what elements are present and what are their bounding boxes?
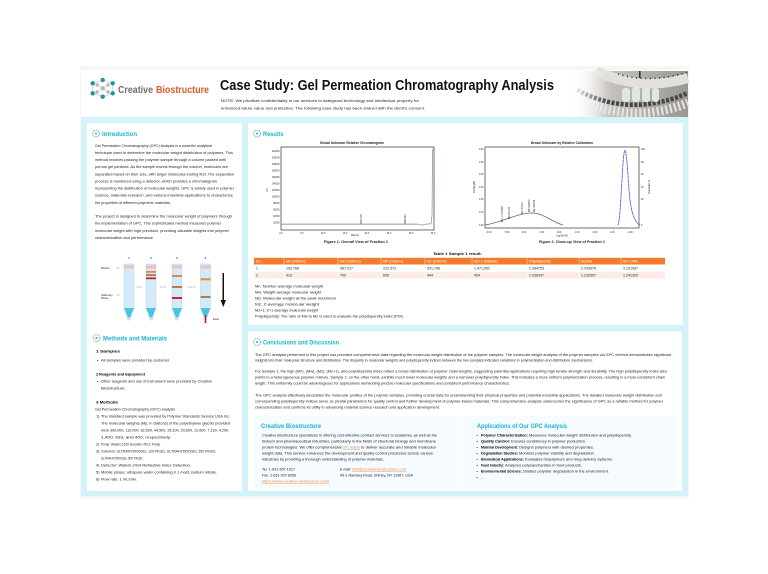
column labels (101, 266, 219, 321)
heading: Conclusions and Discussion: Conclusions and Discussion (263, 339, 339, 346)
text: introduction: characterization and performance. (95, 235, 154, 240)
table: sample 1 result: 2.344753 (529, 266, 544, 270)
poster shadow (80, 66, 689, 498)
chart: figure 1 chromatogram: 100000 (272, 196, 280, 198)
text: introduction (95, 143, 235, 240)
text: methods: Gel Permeation Chromatography (GPC) analysis (95, 406, 175, 412)
icon: molecule (90, 78, 115, 99)
chart: figure 2 relative calibration: 0.00 (479, 225, 484, 227)
table: sample 1 result: 1 (256, 266, 258, 270)
table: sample 1 result: 413 (286, 274, 292, 278)
chart: figure 2 relative calibration: Mw=367017 (522, 201, 524, 214)
text: table notes (255, 284, 404, 318)
text: methods: 1) (96, 414, 100, 418)
chart: figure 1 chromatogram: 26.641 (404, 214, 407, 222)
heading: Methods and Materials: Methods and Materials (103, 335, 167, 342)
logo wordmark: Creative (118, 85, 153, 96)
chart: figure 1 chromatogram: 60000 (273, 210, 280, 212)
chart: figure 2 relative calibration: Mz=931796 (509, 206, 511, 219)
column labels: Elute (213, 317, 219, 321)
column labels: Stationary (101, 293, 113, 297)
text: introduction: The project is designed to determine the molecular weight of polymers through (95, 214, 232, 218)
callout: Creative Biostructure: Fax: 1-631-207-8356 (262, 472, 296, 478)
text: conclusions: characterization and confirms its utility in advancing material science research and application development. (255, 404, 440, 410)
text: conclusions: points to a heterogeneous polymer mixture. Sample 2, on the other hand, exhibits much lower molecular weights and a narrower polydispersity index. This indicates a more uniform polymerization process, resulting in a more consistent chain (255, 374, 665, 379)
chart: figure 2 relative calibration: 0 (641, 225, 643, 227)
callout: Applications of Our GPC Analysis: Studies polymer degradation in the environment. (523, 468, 609, 474)
chart: figure 2 relative calibration: 0.10 (479, 212, 484, 214)
callout: Creative Biostructure: protein technologies. We offer comprehensive (262, 444, 342, 450)
callout: Applications of Our GPC Analysis: • (476, 468, 478, 474)
logo wordmark: Biostructure (156, 85, 209, 96)
text: methods: 5) (96, 470, 100, 474)
text: methods: 1,400, 633, and 400, respectively. (101, 434, 171, 440)
text: introduction: science, materials research, and various industrial applications to characterize (95, 193, 233, 198)
text: introduction: representing the distribution of molecular weights. GPC is widely used in polymer (95, 186, 235, 190)
chart: figure 2 relative calibration: 1.00 (575, 232, 580, 234)
callout: Applications of Our GPC Analysis: Biomedical Applications: (481, 456, 524, 462)
text: methods: • (97, 378, 99, 384)
callout: Applications of Our GPC Analysis: ... (481, 474, 484, 480)
chart: figure 2 relative calibration: Broad Unknown by Relative Calibration (531, 141, 593, 145)
table: sample 1 result: 931,796 (427, 266, 440, 270)
chart: figure 1 chromatogram: mV (267, 188, 269, 192)
chart: figure 1 chromatogram: 80000 (273, 203, 280, 205)
text: table notes: Polydispersity: The ratio of Mw to Mn is used to evaluate the polydispersity index (PDI). (255, 314, 404, 318)
text: table notes: Mn: Number average molecular weight (255, 284, 324, 288)
text: methods: Other reagents and use of instrument were provided by Creative (101, 378, 212, 384)
chart: figure 1 chromatogram: 35.0 (431, 233, 436, 235)
table: sample 1 result: 1,471,652 (474, 266, 490, 270)
callout: Applications of Our GPC Analysis: Evaluates biopolymers and drug delivery systems. (525, 456, 613, 462)
chart: figure 2 relative calibration (473, 141, 651, 244)
text: introduction: porous gel particles. As the sample travels through the column, molecules are (95, 164, 228, 169)
table: sample 1 result: Mz+1 (Daltons) (474, 260, 498, 264)
table: sample 1 result: No. (256, 260, 261, 264)
callout: Creative Biostructure: Creative Biostructure specializes in offering cost-effective contract services to academia, as well as the (262, 432, 437, 438)
text: methods: 3) (96, 448, 100, 454)
chart: figure 2 relative calibration: Figure 2. Close-up View of Fraction 1 (539, 239, 606, 244)
text: table notes: Mw: Weight average molecular weight (255, 290, 322, 294)
chart: figure 1 chromatogram: 5.0 (300, 233, 304, 235)
callout: Applications of Our GPC Analysis: Environmental Science: (481, 468, 522, 474)
callout: Applications of Our GPC Analysis: Material Development: (481, 444, 518, 450)
callout: Creative Biostructure: weight data. This service enhances the development and quality control processes across various (262, 450, 433, 456)
text: methods: All samples were provided by customer. (101, 358, 170, 362)
header background (81, 70, 688, 117)
heading: Results: Results (263, 131, 284, 138)
chart: figure 2 relative calibration: MP=222573 (529, 199, 531, 212)
text: methods: 6) (96, 476, 100, 482)
panel: results (248, 123, 683, 325)
chart: figure 2 relative calibration: 0.30 (479, 187, 484, 189)
callout: Creative Biostructure: Creative Biostructure (261, 424, 322, 430)
text: table notes: Mp: Molecular weight at the peak maximum (255, 296, 336, 300)
logo (90, 78, 209, 99)
callout: Creative Biostructure (254, 416, 457, 488)
callout: Applications of Our GPC Analysis: • (476, 474, 478, 480)
table: sample 1 result: MP (Daltons) (383, 260, 403, 264)
chart: figure 2 relative calibration: Log Mol Wt (556, 234, 568, 238)
table: sample 1 result: Mz+1/Mw (623, 260, 639, 264)
header photo: autosampler (572, 71, 688, 117)
chart: figure 1 chromatogram: 30.0 (409, 233, 414, 235)
text: conclusions: length. This uniformity could be advantageous for applications demanding precise molecular specifications and consistent performance characteristics. (255, 380, 510, 386)
column 2: 2 (150, 256, 152, 260)
column labels: Mixture (101, 266, 110, 270)
chart: figure 2 relative calibration: 6.00 (487, 232, 492, 234)
text: introduction: the properties of different polymeric materials. (95, 200, 171, 205)
table: sample 1 result: 444 (427, 274, 433, 278)
callout: Applications of Our GPC Analysis: Designs polymers with desired properties. (519, 444, 594, 450)
text: conclusions: For Sample 1, the high (Mn), (Mw), (Mz), (Mz+1), and polydispersity index reflect a broad distribution of polymer chain lengths, suggesting potential applications requiring high tensile strength and durability. The high polydispersity index also (255, 368, 667, 374)
text: methods (95, 348, 230, 482)
callout: Applications of Our GPC Analysis: Polymer Characterization: (481, 432, 528, 438)
callout: Creative Biostructure: https://www.creative-biostructure.com/ (262, 478, 330, 484)
table: sample 1 result: Mz/Mw (581, 260, 593, 264)
callout: Applications of Our GPC Analysis: Applications of Our GPC Analysis (477, 424, 568, 430)
chart: figure 1 chromatogram: 160000 (272, 177, 280, 179)
column 4: 4 (205, 256, 207, 260)
chart: figure 2 relative calibration: 0.50 (479, 162, 484, 164)
chart: figure 1 chromatogram (267, 141, 436, 244)
chart: figure 2 relative calibration: dwt/d(logM) (473, 181, 476, 193)
chart: figure 2 relative calibration: -2.00 (627, 232, 633, 234)
table: sample 1 result: 1.241309 (623, 274, 638, 278)
chart: figure 1 chromatogram: 240000 (272, 151, 280, 153)
column 3: 3 (176, 256, 178, 260)
chart: figure 2 relative calibration: 0.00 (593, 232, 598, 234)
text: introduction: molecular weight with high precision, providing valuable insights into polymer (95, 228, 230, 233)
logo wordmark (118, 85, 209, 96)
chart: figure 1 chromatogram: 20.079 (360, 214, 363, 222)
callout: Applications of Our GPC Analysis: • (476, 456, 478, 462)
panel: introduction, column diagram, methods (87, 123, 242, 491)
callout: Creative Biostructure: to deliver accurate and reliable molecular (361, 444, 437, 450)
table: sample 1 result: 222,573 (383, 266, 396, 270)
text: conclusions: insights into their molecular structure and distribution. The disparity in molecular weights and polydispersity indices between the two samples indicates variations in polymerization and distribution mechanisms. (255, 358, 593, 362)
text: introduction: Gel Permeation Chromatography (GPC) Analysis is a powerful analytical (95, 143, 212, 148)
chart: figure 2 relative calibration: 0.60 (479, 149, 484, 151)
chart: figure 1 chromatogram: 220000 (272, 158, 280, 160)
table: sample 1 result: 2.243676 (581, 266, 596, 270)
callout: Creative Biostructure: biotech and pharmaceutical industries, particularly in the fields of structural biology and membrane (262, 438, 436, 444)
text: methods: • (97, 358, 99, 362)
text: methods: The standard sample was provided by Polymer Standards Service USA Inc. (101, 414, 230, 418)
text: methods: ULTRAHYDROGEL 500 PKGD. (101, 456, 143, 460)
callout: Applications of Our GPC Analysis: • (476, 450, 478, 456)
table: sample 1 result: 700 (340, 274, 346, 278)
heading: Introduction: Introduction (102, 131, 137, 138)
table: sample 1 result: 1.036437 (529, 274, 544, 278)
text: methods: Flow rate: 1 mL/min. (101, 476, 137, 482)
table: sample 1 result: 2 (256, 274, 258, 278)
background band (81, 117, 688, 496)
text: conclusions: corresponding polydispersity indices serve as pivotal parameters for quality control and further development of polymer-based materials. This comprehensive analysis underscores the significance of GPC as a reliable method for polymer (255, 398, 664, 404)
chart: figure 1 chromatogram: 0.0 (279, 233, 283, 235)
table: sample 1 result: Mn (Daltons) (286, 260, 306, 264)
table: sample 1 result: Table 1 Sample 1 result: (433, 251, 482, 256)
table: sample 1 result: 650 (383, 274, 389, 278)
chart: figure 2 relative calibration: 100 (641, 149, 646, 151)
chart: figure 2 relative calibration: -1.00 (609, 232, 615, 234)
table: sample 1 result: Polydispersity (529, 260, 551, 264)
chart: figure 2 relative calibration: 60 (641, 174, 644, 176)
table: sample 1 result: 153,766 (286, 266, 299, 270)
callout: Applications of Our GPC Analysis (458, 416, 677, 488)
callout: Applications of Our GPC Analysis: Analyzes polysaccharides in food products. (505, 462, 582, 468)
chart: figure 1 chromatogram: Broad Unknown Relative Chromatogram (320, 141, 384, 145)
chart: figure 2 relative calibration: 2.00 (557, 232, 562, 234)
callout: Applications of Our GPC Analysis: • (476, 444, 478, 450)
chart: figure 2 relative calibration: Cumulative % (648, 180, 651, 194)
text: methods: were 300,000, 110,000, 82,500, 44,500, 26,100, 20,600, 12,600, 7,130, 4,290, (101, 428, 229, 432)
note text (221, 98, 425, 110)
chart: figure 2 relative calibration: Mz+1=1471652 (502, 205, 504, 222)
chart: figure 1 chromatogram: Figure 1. Overall View of Fraction 1 (324, 239, 389, 244)
diagram: GPC column separation (101, 256, 226, 323)
note text: NOTE: We prioritize confidentiality in our services to safeguard technology and intellectual property for (221, 98, 420, 103)
text: introduction: the implementation of GPC. This sophisticated method measures polymer (95, 221, 222, 226)
chart: figure 1 chromatogram: 25.0 (387, 233, 392, 235)
table: sample 1 result: 367,017 (340, 266, 353, 270)
chart: figure 1 chromatogram: Minutes (351, 234, 360, 237)
text: conclusions: The GPC analysis performed in this project has provided comprehensive data regarding the molecular weight distribution of the polymer samples. The molecular weight analysis of the polymer samples via GPC method demonstrates significant (255, 352, 672, 357)
text: methods: The molecular weights (Mp, in Daltons) of the polyethylene glycols provided (101, 420, 230, 426)
note text: enhanced future value and protection. The following case study has been shared with the client's consent. (221, 106, 425, 110)
chart: figure 1 chromatogram: 140000 (272, 184, 280, 186)
text: table notes: Mz+1: Z+1 average molecular weight (255, 308, 319, 312)
heading: Results (254, 130, 284, 138)
chart: figure 1 chromatogram: 10.0 (321, 233, 326, 235)
arrow: downward flow (220, 273, 226, 307)
title: Case Study: Gel Permeation Chromatography Analysis (220, 78, 554, 94)
chart: figure 2 relative calibration: 20 (641, 199, 644, 201)
chart: figure 2 relative calibration: 0.40 (479, 174, 484, 176)
chart: figure 2 relative calibration: 40 (641, 187, 644, 189)
column 1: 1 (128, 256, 130, 260)
callout: Creative Biostructure: 45-1 Ramsey Road, Shirley, NY 11967, USA (340, 472, 413, 478)
callout: Applications of Our GPC Analysis: • (476, 462, 478, 468)
text: methods: Biostructure. (101, 386, 126, 390)
chart: figure 1 chromatogram: 200000 (272, 164, 280, 166)
text: introduction: separated based on their size, with larger molecules eluting first. The separation (95, 171, 234, 176)
table: sample 1 result (254, 251, 665, 278)
text: introduction: method involves passing the polymer sample through a column packed with (95, 157, 226, 162)
table: sample 1 result: 3.101087 (623, 266, 638, 270)
callout: Creative Biostructure: info@creative-biostructure.com (352, 466, 406, 472)
text: methods: 1 Samples (96, 348, 120, 354)
callout: Creative Biostructure: GPC analysis (343, 444, 360, 450)
chart: figure 2 relative calibration: 5.00 (505, 232, 510, 234)
chart: figure 1 chromatogram: 20000 (273, 222, 280, 224)
callout: Applications of Our GPC Analysis: Measures molecular weight distribution and polydispersity. (529, 432, 632, 438)
callout: Creative Biostructure: Tel: 1-631-357-1017 (262, 466, 295, 472)
callout: Applications of Our GPC Analysis: Monitors polymer stability and degradation. (519, 450, 595, 456)
panel: conclusions and discussion (248, 332, 682, 491)
callout: Applications of Our GPC Analysis: • (476, 432, 478, 438)
chart: figure 1 chromatogram: 20.0 (365, 233, 370, 235)
text: table notes: Mz: Z-average molecular weight (255, 302, 320, 306)
heading: Introduction (93, 130, 137, 138)
chart: figure 1 chromatogram: 180000 (272, 170, 280, 172)
callout: Applications of Our GPC Analysis: Degradation Studies: (481, 450, 518, 456)
callout: Applications of Our GPC Analysis: Food Industry: (481, 462, 504, 468)
text: introduction: technique used to determine the molecular weight distribution of polymers. This (95, 150, 233, 155)
text: methods: 2) (96, 442, 100, 446)
chart: figure 2 relative calibration: 0.20 (479, 199, 484, 201)
chart: figure 1 chromatogram: 15.0 (343, 233, 348, 235)
text: methods: Detector: Waters 2414 Refractive Index Detection. (101, 462, 191, 468)
callout: Applications of Our GPC Analysis: Quality Control: (481, 438, 510, 444)
chart: figure 1 chromatogram: 120000 (272, 190, 280, 192)
text: methods: Columns: ULTRAHYDROGEL 120 PKGD, ULTRAHYDROGEL 250 PKGD, (101, 448, 216, 454)
text: introduction: process is monitored using a detector, which provides a chromatogram (95, 178, 217, 183)
chart: figure 2 relative calibration: 3.00 (540, 232, 545, 234)
chart: figure 1 chromatogram: 40000 (273, 216, 280, 218)
column labels: Phase (101, 296, 109, 300)
callout: Applications of Our GPC Analysis: Ensures consistency in polymer production. (511, 438, 586, 444)
text: conclusions: The GPC analysis effectively elucidates the molecular profiles of the polymer samples, providing crucial data for understanding their physical properties and potential industrial applications. The detailed molecular weight distribution and (255, 392, 662, 398)
callout: Applications of Our GPC Analysis: • (476, 438, 478, 444)
text: conclusions (255, 352, 672, 410)
table: sample 1 result: Mw (Daltons) (340, 260, 361, 264)
text: methods: Pump: Waters 1515 Isocratic HPLC Pump. (101, 442, 161, 446)
text: methods: 4) (96, 462, 100, 468)
table: sample 1 result: 454 (474, 274, 480, 278)
table: sample 1 result: 1.232557 (581, 274, 596, 278)
callout: Creative Biostructure: industries by providing a thorough understanding of polymer materials. (262, 456, 384, 462)
chart: figure 2 relative calibration: Mn=153766 (534, 199, 536, 212)
text: methods: 2 Reagents and Equipment (96, 372, 146, 376)
table: sample 1 result: Mz (Daltons) (427, 260, 447, 264)
text: methods: Mobile phase: ultrapure water containing 0.1 mol/L sodium nitrate. (101, 470, 217, 474)
text: methods: 3 Methods (96, 400, 118, 404)
chart: figure 2 relative calibration: 4.00 (522, 232, 527, 234)
callout: Creative Biostructure: E-mail: (340, 466, 351, 472)
chart: figure 2 relative calibration: 80 (641, 162, 644, 164)
